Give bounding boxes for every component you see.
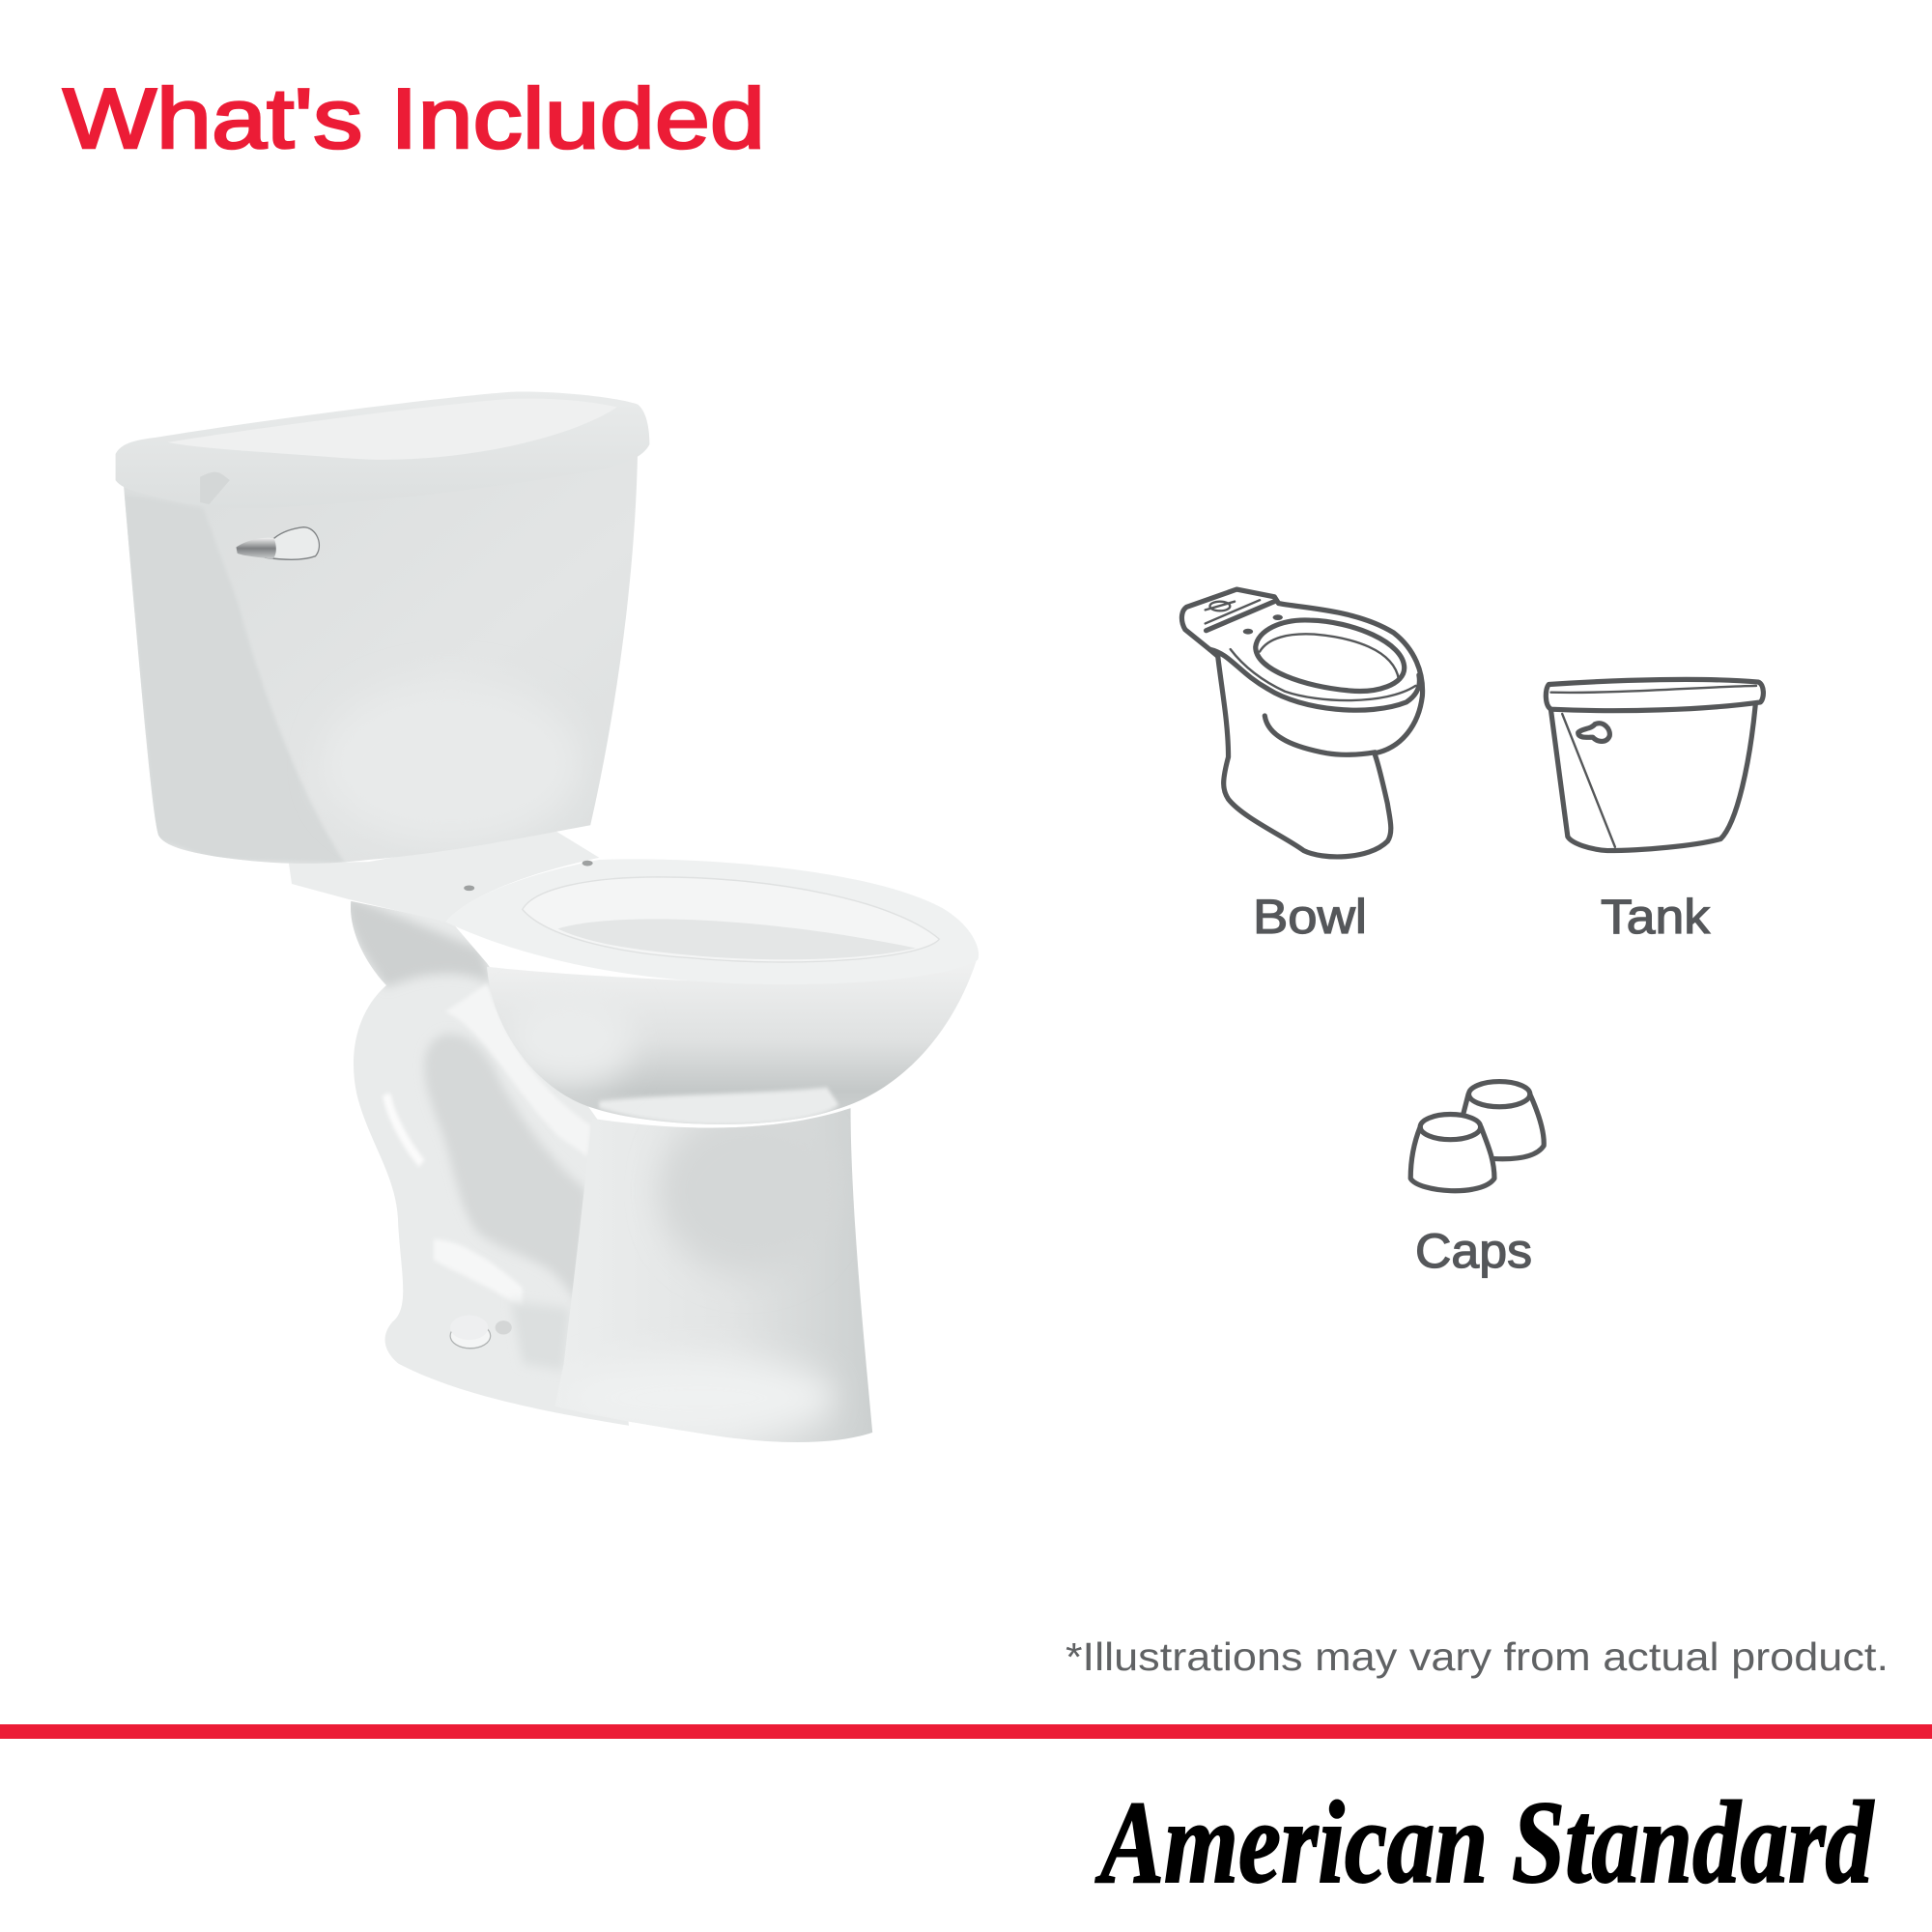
label: Tank: Tank bbox=[1601, 890, 1711, 944]
icon: caps bbox=[1410, 1082, 1544, 1191]
bowl underside bbox=[487, 956, 978, 1124]
bowl rim bbox=[445, 859, 979, 984]
title: What's Included bbox=[63, 71, 765, 166]
icon: tank bbox=[1546, 679, 1763, 851]
icon: bowl bbox=[1181, 589, 1423, 857]
pedestal bbox=[554, 1108, 872, 1442]
tank body bbox=[124, 445, 638, 864]
product photo: two-piece toilet bbox=[116, 392, 979, 1442]
footnote: *Illustrations may vary from actual product. bbox=[1065, 1634, 1889, 1679]
trapway and rear of bowl bbox=[345, 895, 629, 1426]
label: Caps: Caps bbox=[1415, 1224, 1532, 1278]
flush handle bbox=[236, 527, 319, 559]
label: Bowl: Bowl bbox=[1253, 890, 1367, 944]
bowl deck bbox=[289, 829, 599, 922]
tank lid bbox=[116, 392, 649, 508]
red divider bbox=[0, 1724, 1932, 1739]
bolt cap at the base bbox=[450, 1315, 512, 1349]
